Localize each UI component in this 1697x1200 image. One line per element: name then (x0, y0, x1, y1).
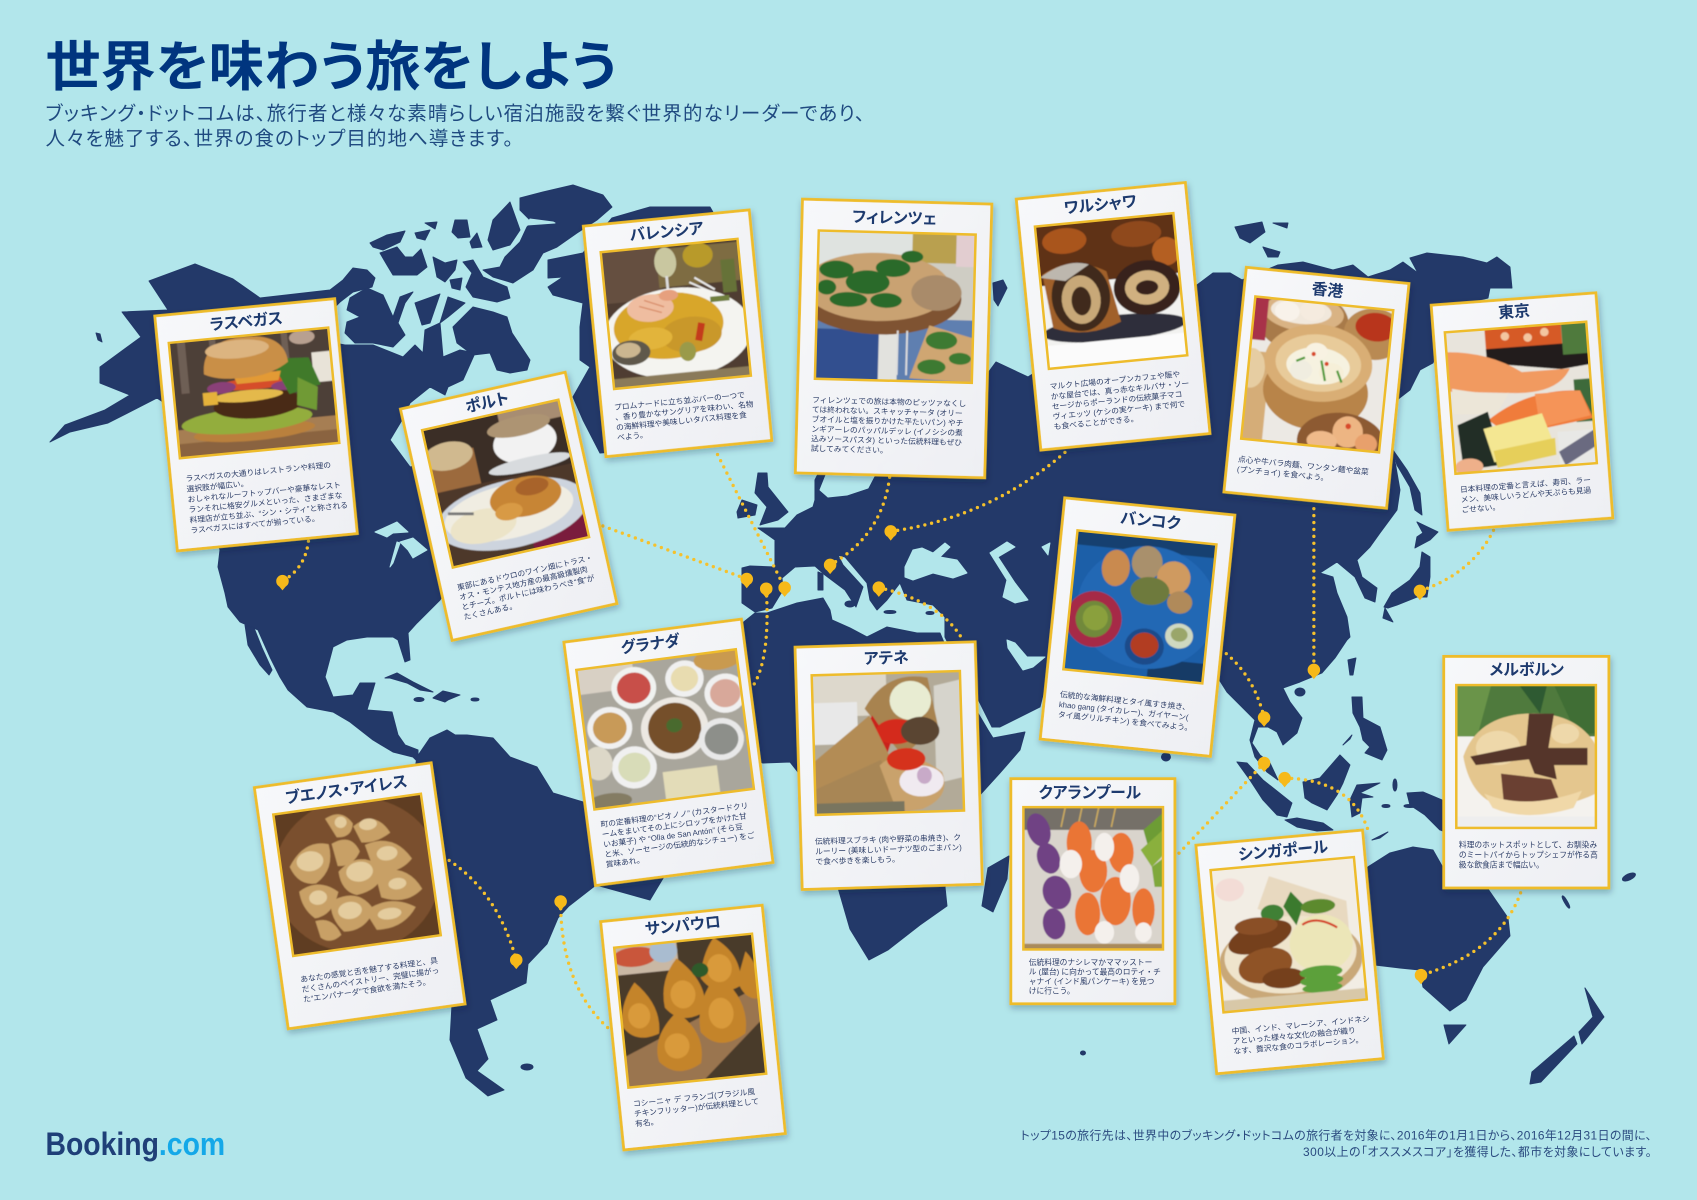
russian arctic islands (993, 222, 1288, 306)
description: ル (屋台) に向かって最高のロティ・チ (1029, 966, 1161, 976)
description: べよう。 (617, 430, 648, 442)
description: 級な飲食店まで幅広い。 (1459, 860, 1544, 870)
caribbean (385, 673, 479, 702)
city name: ラスベガス (209, 309, 284, 334)
photo: paella (595, 238, 756, 390)
photo: poppy seed roll (1032, 213, 1190, 369)
description: 料理のホットスポットとして、お馴染み (1459, 840, 1597, 850)
baja california (245, 625, 272, 675)
seas and lakes (375, 219, 1050, 670)
description: で食べ歩きを楽しもう。 (815, 854, 900, 866)
description: オス・モンテス地方産の最高級燻製肉 (458, 564, 589, 602)
description: プロムナードに立ち並ぶバーの一つで (614, 389, 746, 412)
description: あなたの感覚と舌を魅了する料理と、具 (300, 955, 439, 984)
description: (プンチョイ) を食べよう。 (1237, 465, 1329, 483)
description: 日本料理の定番と言えば、寿司、ラー (1460, 475, 1591, 494)
description: マルクト広場のオープンカフェや賑や (1049, 369, 1181, 391)
description: 料理店が立ち並ぶ、“シン・シティ”と称される (189, 500, 348, 525)
description: とチーズ。ポルトには味わうべき“食”が (460, 572, 596, 612)
description: 伝統料理のナシレマかママッストー (1029, 957, 1152, 967)
card: バレンシア (583, 210, 772, 457)
tasmania (1444, 1025, 1466, 1044)
intro text: 人々を魅了する、世界の食のトップ目的地へ導きます。 (45, 128, 513, 150)
description: 込みソースパスタ) といった伝統料理もぜひ (811, 433, 963, 447)
description: 町の定番料理の“ピオノノ” (カスタードクリ (600, 800, 749, 829)
description: なす、贅沢な食のコラボレーション。 (1233, 1034, 1363, 1056)
map pins (276, 525, 1427, 984)
city name: グラナダ (620, 631, 682, 657)
description: ては終われない。スキャッチャータ (オリー (812, 404, 963, 418)
new zealand (1530, 988, 1604, 1084)
photo: coxinha (611, 931, 769, 1088)
city name: アテネ (864, 649, 909, 668)
city name: フィレンツェ (852, 209, 937, 228)
description: セージからポーランドの伝統菓子マコ (1051, 389, 1183, 411)
city name: バンコク (1119, 509, 1182, 533)
description: アといった様々な文化の融合が織り (1232, 1025, 1356, 1046)
photo: souvlaki wrap (812, 671, 964, 815)
description: ラスベガスにはすべてが揃っている。 (190, 513, 320, 535)
intro text: ブッキング・ドットコムは、旅行者と様々な素晴らしい宿泊施設を繋ぐ世界的なリーダーであり、 (45, 102, 865, 125)
greenland (548, 207, 740, 453)
description: ームをまいてその上にシロップをかけた甘 (601, 810, 748, 839)
card: グラナダ (564, 619, 773, 886)
photo: burger (169, 328, 339, 458)
description: ルーリー (美味しいドーナツ型のごまパン) (815, 842, 962, 856)
description: 東部にあるドウロのワイン畑にトラス・ (456, 552, 594, 592)
card: ワルシャワ (1016, 183, 1210, 450)
city name: シンガポール (1237, 838, 1329, 864)
card: フィレンツェ (794, 199, 992, 478)
description: だくさんのペイストリー、完璧に揚がっ (301, 965, 440, 994)
card: ポルト (400, 372, 617, 640)
card: クアランプール (1011, 779, 1175, 1004)
city name: ワルシャワ (1063, 193, 1137, 218)
description: 賞味あれ。 (605, 854, 645, 869)
card: 東京 (1431, 293, 1613, 530)
intro text (45, 102, 865, 150)
description: ンギアーレのパッパルデッレ (イノシシの煮 (811, 424, 963, 438)
card: サンパウロ (601, 905, 785, 1150)
description: 有名。 (635, 1116, 659, 1129)
photo: tapas (569, 644, 759, 813)
description: 点心や牛バラ肉麺、ワンタン麺や盆菜 (1238, 454, 1369, 477)
title: 世界を味わう旅をしよう (45, 37, 617, 97)
description: 中国、インド、マレーシア、インドネシ (1231, 1013, 1370, 1036)
madagascar (982, 856, 1009, 912)
description: かな屋台では、真っ赤なキルバサ・ソー (1050, 378, 1190, 401)
eurasia (742, 253, 1512, 780)
description: ランそれに格安グルメといった、さまざまな (188, 490, 343, 515)
description: 伝統的な海鮮料理とタイ風すき焼き、 (1060, 689, 1191, 712)
photo: seafood on blue plate (1061, 530, 1223, 684)
description: と米、ソーセージの伝統的なシチュー) をご (604, 830, 755, 859)
footnote (1021, 1129, 1652, 1159)
africa (700, 598, 1025, 960)
description: た“エンパナーダ”で食欲を満たそう。 (303, 976, 431, 1004)
description: たくさんある。 (463, 601, 518, 622)
japan (1383, 522, 1438, 622)
card: メルボルン (1444, 656, 1609, 888)
north america (50, 264, 570, 762)
photo: pizza (796, 230, 976, 383)
new guinea (1407, 792, 1590, 880)
arctic islands (96, 185, 612, 373)
logo: Booking.com (45, 1126, 225, 1162)
photo: empanadas (264, 787, 450, 963)
route lines (282, 452, 1521, 1028)
description: コシーニャ デ フランゴ(ブラジル風 (633, 1086, 756, 1109)
footnote: 300以上の「オススメスコア」を獲得した、都市を対象にしています。 (1303, 1145, 1652, 1159)
card: シンガポール (1196, 830, 1383, 1074)
card: 香港 (1224, 267, 1410, 508)
description: ヴィエッツ (ケシの実ケーキ) まで何で (1052, 398, 1186, 421)
description: おしゃれなルーフトップバーや豪華なレスト (187, 480, 341, 504)
description: フィレンツェでの旅は本物のピッツァなくし (812, 394, 967, 408)
card: バンコク (1040, 498, 1235, 756)
city name: クアランプール (1039, 784, 1141, 802)
description: も食べることができる。 (1053, 413, 1139, 431)
city name: バレンシア (629, 220, 705, 245)
description: いお菓子) や “Olla de San Antón” (そら豆 (603, 821, 744, 849)
description: タイ風グリルチキン) を食べてみよう。 (1058, 709, 1193, 733)
photo: crab skewers (1023, 807, 1163, 949)
description: ャナイ (インド風パンケーキ) を見つ (1029, 977, 1154, 986)
sakhalin (1393, 450, 1422, 515)
city name: メルボルン (1489, 661, 1564, 679)
description: ラスベガスの大通りはレストランや料理の (185, 460, 331, 484)
city name: 東京 (1498, 301, 1531, 322)
southeast asia islands (1161, 658, 1416, 840)
description: のミートパイからトップシェフが作る高 (1459, 850, 1598, 860)
description: 、香り豊かなサングリアを味わい、名物 (615, 399, 754, 422)
australia (1330, 847, 1510, 1011)
city name: サンパウロ (644, 913, 722, 939)
city name: ポルト (464, 389, 511, 416)
card: ブエノス・アイレス (254, 763, 465, 1029)
south america (410, 730, 680, 1096)
description: khao gang (タイカレー)、ガイヤーン( (1059, 699, 1189, 722)
photo: sushi (1445, 322, 1597, 477)
photo: meat pie (1456, 685, 1596, 828)
city name: 香港 (1311, 280, 1344, 301)
description: の海鮮料理や美味しいタパス料理を食 (616, 409, 747, 432)
footnote: トップ15の旅行先は、世界中のブッキング・ドットコムの旅行者を対象に、2016年の1月1日から、2016年12月31日の間に、 (1021, 1129, 1652, 1143)
world map (50, 185, 1637, 1096)
description: けに行こう。 (1029, 986, 1075, 996)
european islands (737, 473, 934, 614)
description: メン、美味しいうどんや天ぷらも見過 (1460, 485, 1592, 504)
city name: ブエノス・アイレス (284, 772, 409, 807)
photo: stew and rice (415, 398, 596, 569)
description: 選択肢が幅広い。 (186, 478, 249, 494)
description: ブオイルと塩を振りかけた平たいパン) やチ (812, 414, 964, 428)
description: チキンフリッター)が伝統料理として (634, 1096, 759, 1119)
card: アテネ (795, 642, 982, 890)
description: 試してみてください。 (811, 444, 888, 455)
description: 伝統料理スブラキ (肉や野菜の串焼き)、ク (815, 832, 961, 846)
description: ごせない。 (1461, 502, 1500, 514)
card: ラスベガス (155, 299, 357, 551)
pacific islands (1080, 871, 1637, 1055)
photo: dim sum (1228, 284, 1408, 478)
photo: chicken rice (1211, 857, 1367, 1012)
